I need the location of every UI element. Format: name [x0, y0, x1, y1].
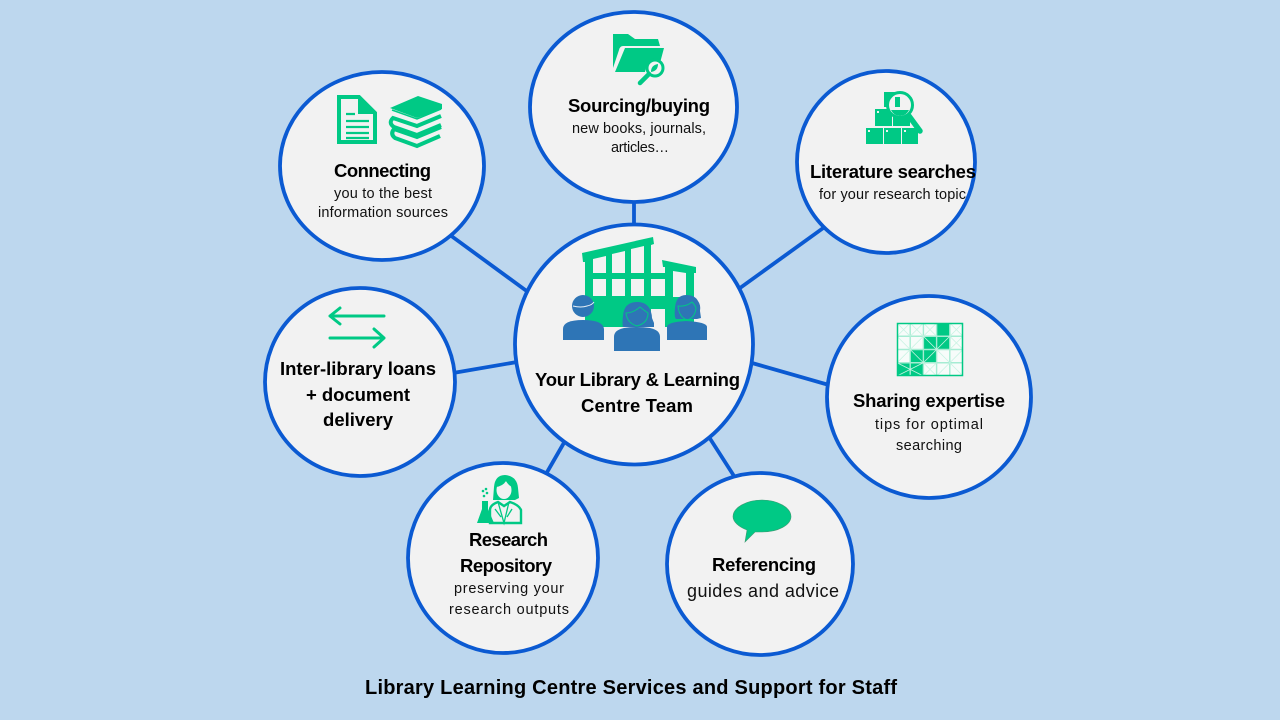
- heading: central team: Your Library & Learning: [535, 369, 740, 390]
- text: sourcing detail: [572, 121, 706, 156]
- text: referencing detail: guides and advice: [687, 581, 839, 601]
- icon: folder with magnifier: [613, 34, 664, 83]
- text: repository detail: [449, 581, 569, 618]
- panel: referencing: [667, 473, 853, 655]
- text: connecting detail: you to the best: [334, 186, 432, 202]
- panel: sourcing/buying: [530, 12, 737, 202]
- icon: boxes with magnifier: [866, 92, 920, 144]
- icon: exchange arrows: [330, 308, 384, 347]
- panel: inter-library loans: [265, 288, 455, 476]
- heading: central team: Centre Team: [581, 395, 693, 416]
- heading: inter-library loans: + document: [306, 384, 410, 405]
- icon: document and books: [339, 96, 442, 146]
- panel: research repository: [408, 463, 598, 653]
- title: Library Learning Centre Services and Support for Staff: [365, 677, 897, 699]
- panel: central team: [515, 224, 753, 464]
- text: repository detail: research outputs: [449, 602, 569, 618]
- text: connecting detail: information sources: [318, 205, 448, 221]
- heading: connecting: Connecting: [334, 160, 431, 181]
- text: repository detail: preserving your: [454, 581, 564, 597]
- panel: connecting: [280, 72, 484, 260]
- text: sourcing detail: new books, journals,: [572, 121, 706, 137]
- heading: inter-library loans: delivery: [323, 409, 394, 430]
- connector lines: [450, 200, 829, 476]
- panel: literature searches: [797, 71, 976, 253]
- icon: search grid: [897, 323, 963, 376]
- text: connecting detail: [318, 186, 448, 221]
- icon: library building and team: [563, 237, 707, 351]
- text: sourcing detail: articles…: [611, 140, 669, 156]
- heading: literature searches: Literature searches: [810, 161, 976, 182]
- heading: referencing: Referencing: [712, 554, 816, 575]
- heading: sharing expertise: Sharing expertise: [853, 390, 1005, 411]
- text: sharing detail: [875, 417, 983, 454]
- heading: sourcing/buying: Sourcing/buying: [568, 95, 710, 116]
- heading: central team: [535, 369, 740, 416]
- panel: sharing expertise: [827, 296, 1031, 498]
- text: literature detail: for your research topic: [819, 187, 966, 203]
- heading: inter-library loans: [280, 358, 436, 430]
- text: sharing detail: tips for optimal: [875, 417, 983, 433]
- icon: speech bubble: [733, 500, 791, 542]
- heading: research repository: Repository: [460, 555, 553, 576]
- heading: research repository: [460, 529, 553, 576]
- heading: inter-library loans: Inter-library loans: [280, 358, 436, 379]
- icon: scientist with flask: [477, 475, 521, 523]
- text: sharing detail: searching: [896, 438, 962, 454]
- heading: research repository: Research: [469, 529, 548, 550]
